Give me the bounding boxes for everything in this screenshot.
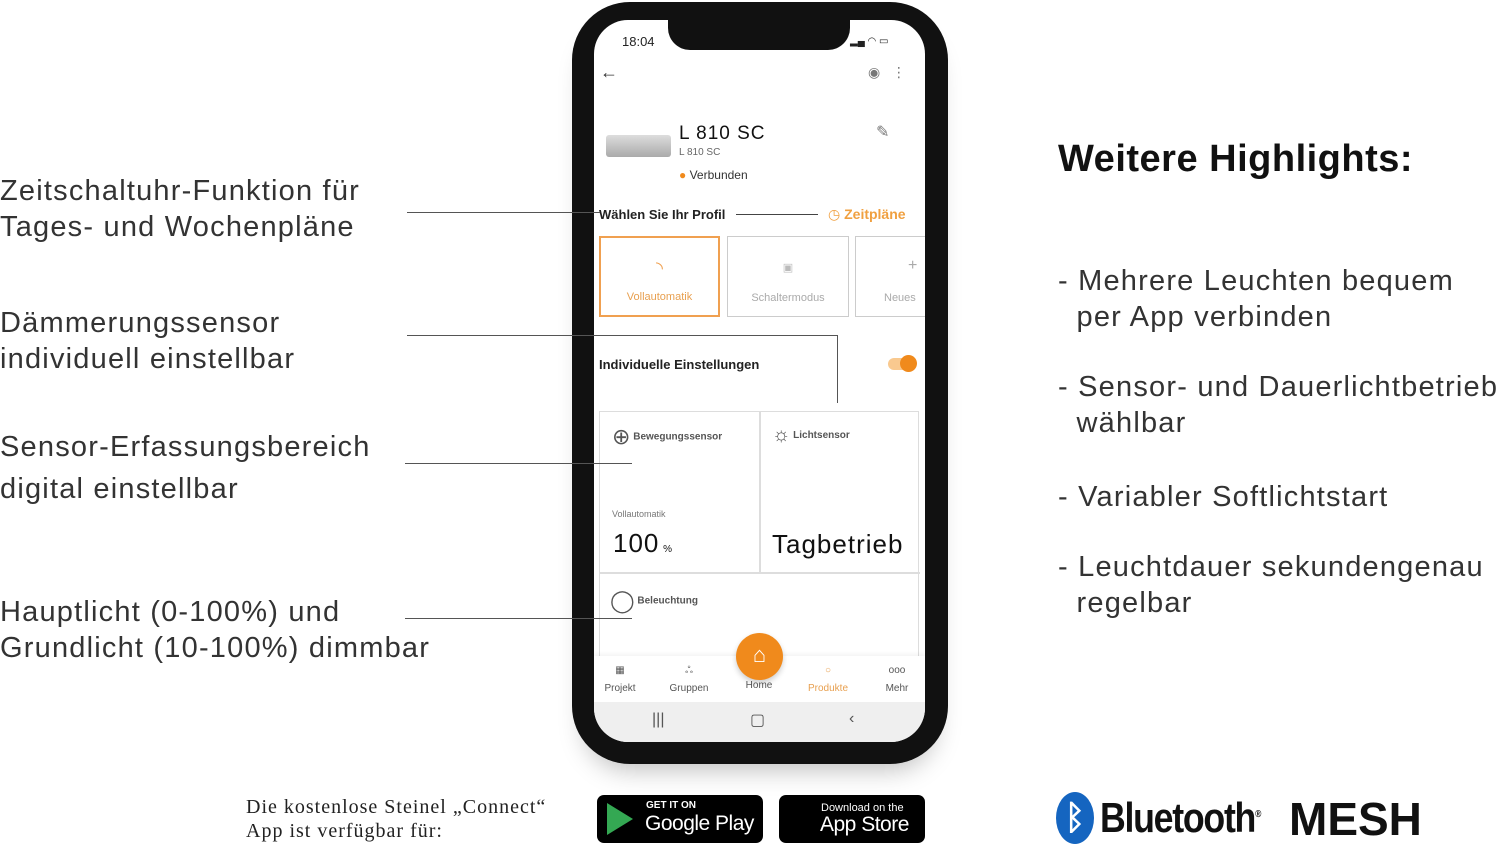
status connected: ● Verbunden xyxy=(679,168,748,182)
text: wählbar xyxy=(1076,407,1186,439)
profile cards: ◝ xyxy=(656,258,663,278)
settings grid: Vollautomatik xyxy=(612,509,666,519)
app availability text: App ist verfügbar für: xyxy=(246,820,443,842)
highlights title: Weitere Highlights: xyxy=(1058,138,1413,180)
screen xyxy=(594,20,925,742)
badge: google play: Google Play xyxy=(645,812,754,835)
left feature 2: Dämmerungssensor xyxy=(0,307,280,339)
edit pencil: ✎ xyxy=(876,124,889,141)
left feature 4: Hauptlicht (0-100%) und xyxy=(0,596,340,628)
bottom nav: Home xyxy=(746,680,772,691)
light sensor: ☼ Lichtsensor xyxy=(772,424,850,446)
bottom nav: Produkte xyxy=(808,683,848,694)
bottom nav: Mehr xyxy=(886,683,908,694)
bluetooth logo: ᛒ xyxy=(1065,799,1085,837)
profile cards xyxy=(599,236,720,317)
bottom nav: ○ xyxy=(825,665,831,676)
left feature 2: individuell einstellbar xyxy=(0,343,295,375)
eye and menu: ◉ ⋮ xyxy=(868,64,906,80)
highlights list: - Mehrere Leuchten bequem xyxy=(1058,265,1454,297)
text: - Variabler Softlichtstart xyxy=(1058,481,1388,513)
individual settings: Individuelle Einstellungen xyxy=(599,357,759,372)
status icons: ▂▄ ◠ ▭ xyxy=(850,36,889,47)
motion sensor: ⊕ Bewegungssensor xyxy=(612,424,722,449)
notch xyxy=(668,20,850,50)
left feature 1 xyxy=(0,175,360,243)
app availability text xyxy=(246,796,546,842)
app availability text: Die kostenlose Steinel „Connect“ xyxy=(246,796,546,818)
text: - Leuchtdauer sekundengenau xyxy=(1058,551,1484,583)
profile cards: Vollautomatik xyxy=(627,291,692,303)
lighting: ◯ Beleuchtung xyxy=(610,588,698,613)
left feature 3: Sensor-Erfassungsbereich xyxy=(0,431,371,463)
home button: ⌂ xyxy=(753,642,766,667)
left feature 3 xyxy=(0,431,371,505)
phone xyxy=(572,2,948,764)
android nav: ▢ xyxy=(750,712,765,729)
android nav xyxy=(594,702,925,742)
left feature 3: digital einstellbar xyxy=(0,473,239,505)
left feature 4: Grundlicht (10-100%) dimmbar xyxy=(0,632,430,664)
Zeitpläne link: ◷ Zeitpläne xyxy=(828,206,906,222)
product image xyxy=(606,135,671,157)
settings grid: 100 % xyxy=(613,528,673,558)
settings grid xyxy=(599,411,919,711)
bottom nav: ஃ xyxy=(685,665,693,676)
bottom nav xyxy=(594,656,925,702)
bottom nav: ▦ xyxy=(615,665,625,676)
android nav: ‹ xyxy=(849,710,854,727)
badge: app store xyxy=(779,795,925,843)
back arrow: ← xyxy=(600,62,618,82)
bottom nav: Projekt xyxy=(604,683,636,694)
badge: app store: App Store xyxy=(820,813,909,836)
status time: 18:04 xyxy=(622,34,655,49)
bottom nav: Gruppen xyxy=(670,683,708,694)
screen: Schaltermodus xyxy=(751,292,825,304)
leader lines xyxy=(407,212,600,213)
screen: ▣ xyxy=(783,262,793,274)
left feature 1: Tages- und Wochenpläne xyxy=(0,211,355,243)
badge: google play: GET IT ON xyxy=(646,800,696,811)
badge: app store: Download on the xyxy=(821,802,904,814)
product title: L 810 SC xyxy=(679,123,766,144)
bluetooth logo xyxy=(1056,792,1094,844)
mesh text: MESH xyxy=(1289,793,1422,845)
home button xyxy=(736,633,783,680)
left feature 2 xyxy=(0,307,295,375)
highlights list: per App verbinden xyxy=(1076,301,1332,333)
left feature 1: Zeitschaltuhr-Funktion für xyxy=(0,175,360,207)
screen: Neues xyxy=(884,292,916,304)
text: regelbar xyxy=(1076,587,1193,619)
android nav: ||| xyxy=(652,711,664,728)
left feature 4 xyxy=(0,596,430,664)
settings grid: Tagbetrieb xyxy=(772,529,903,559)
screen: L 810 SC xyxy=(679,147,720,158)
highlights list xyxy=(1058,265,1454,333)
toggle xyxy=(888,358,916,370)
profile header: Wählen Sie Ihr Profil xyxy=(599,207,725,222)
text: Bluetooth® xyxy=(1100,794,1260,841)
badge: google play xyxy=(597,795,763,843)
bottom nav: ooo xyxy=(889,665,905,676)
screen: + xyxy=(908,257,917,274)
text: - Sensor- und Dauerlichtbetrieb xyxy=(1058,371,1498,403)
